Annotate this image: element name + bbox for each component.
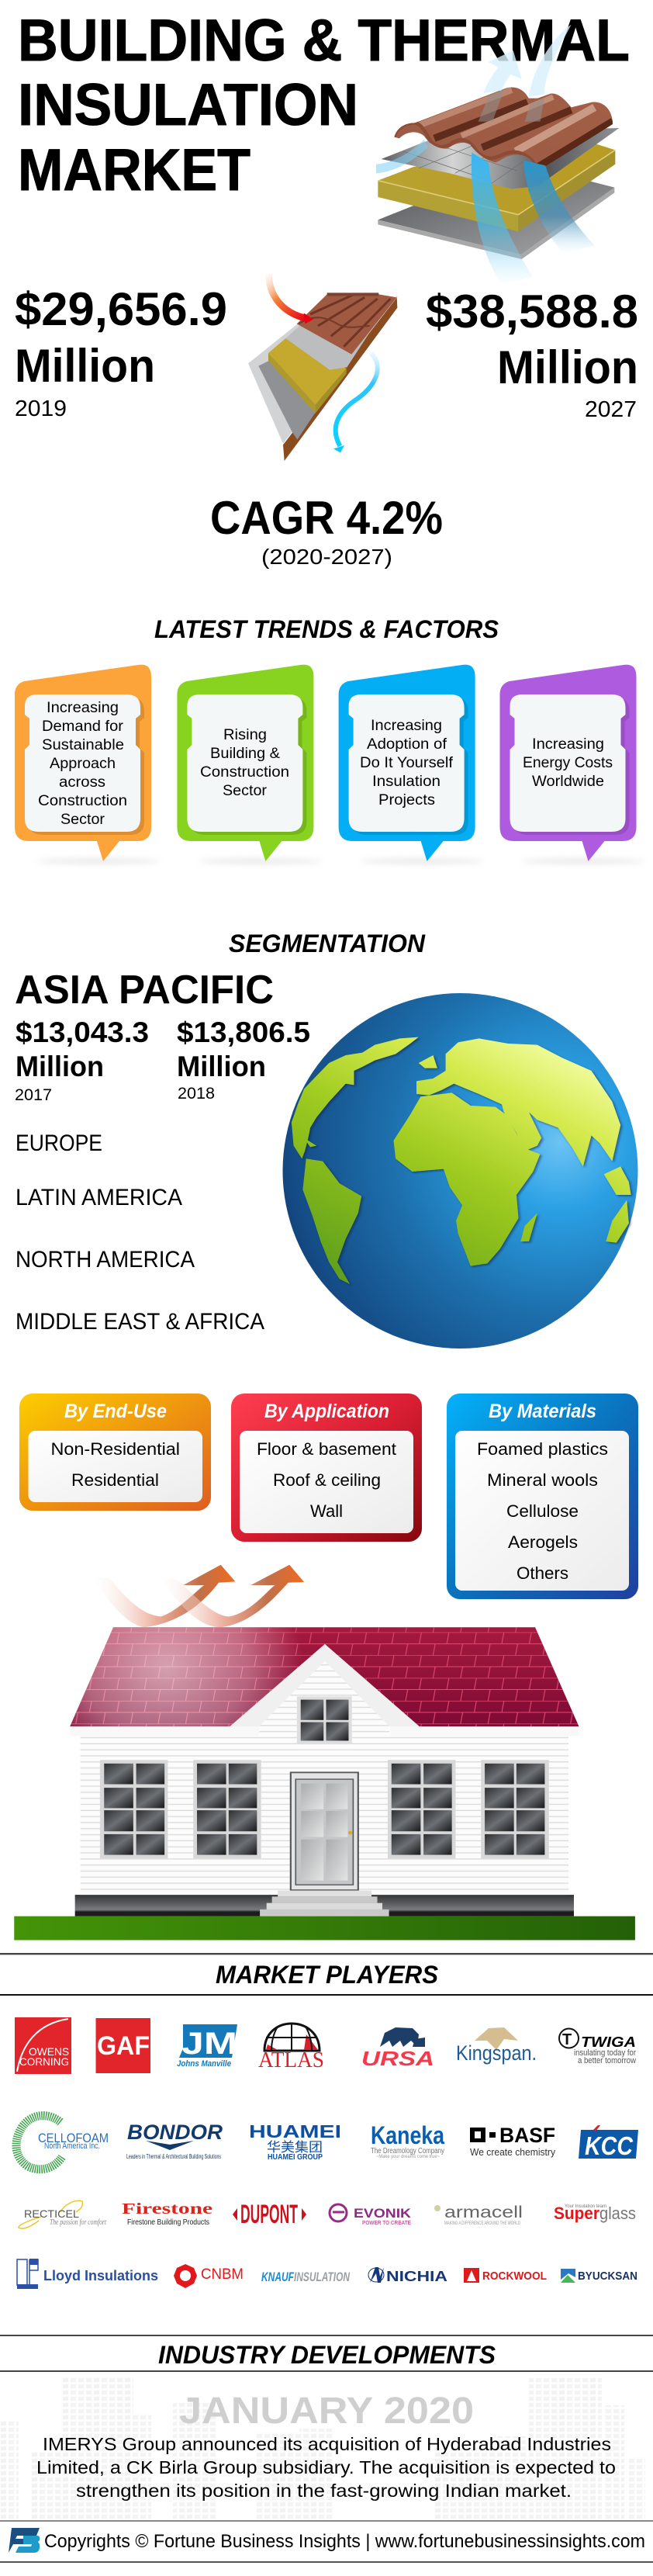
title: [18, 8, 630, 203]
logo: Firestone: Firestone Building Products: [127, 2218, 209, 2227]
logo: Nichia: [368, 2267, 447, 2284]
icon: pale up arrows over heading: [483, 25, 572, 97]
title: MARKET: [18, 137, 250, 203]
logo: Kaneka: The Dreamology Company: [371, 2147, 444, 2155]
logo: BASF: We create chemistry: [470, 2146, 555, 2158]
logo: Superglass: [554, 2204, 636, 2223]
logo: Cellofoam: North America Inc.: [44, 2141, 100, 2151]
stat: CAGR: CAGR 4.2%: [210, 492, 443, 544]
stat: 2027 market value: 2027: [585, 397, 637, 422]
text: development date: JANUARY 2020: [179, 2391, 474, 2432]
panel: Asia Pacific stats: Million: [177, 1051, 266, 1082]
stat: 2019 market value: [15, 283, 227, 421]
logo: Atlas: [258, 2024, 324, 2072]
logo: Byucksan: [561, 2269, 637, 2283]
icon: layered roof insulation: [376, 87, 619, 285]
heading: industry developments: INDUSTRY DEVELOPMENTS: [158, 2341, 496, 2369]
logo: Twiga: [559, 2028, 636, 2065]
logo: Knauf Insulation: INSULATION: [294, 2270, 351, 2284]
logo: Bondor: BONDOR: [127, 2121, 223, 2144]
icon: heat arrows: [92, 1565, 304, 1627]
text: development description: [36, 2434, 616, 2501]
logo: Lloyd Insulations: [17, 2259, 158, 2289]
panel: trend card orange: across: [59, 774, 105, 791]
icon: house: [14, 1627, 635, 1940]
text: other regions: NORTH AMERICA: [16, 1247, 195, 1272]
panel: Asia Pacific stats: Million: [16, 1051, 104, 1082]
panel: Asia Pacific stats: $13,043.3: [16, 1016, 149, 1048]
panel: trend card blue: Do It Yourself: [360, 755, 454, 771]
logo: BASF: BASF: [499, 2124, 555, 2147]
panel: trend card blue: Increasing: [371, 718, 442, 734]
panel: by end-use: Residential: [71, 1470, 159, 1490]
panel: trend card blue: Adoption of: [367, 736, 447, 753]
logo: Bondor: Leaders in Thermal & Architectural Building Solutions: [126, 2153, 221, 2160]
text: development description: IMERYS Group announced its acquisition of Hyderabad Industries: [43, 2434, 611, 2454]
panel: Asia Pacific stats: 2018: [178, 1085, 215, 1103]
panel: trend card orange: Sector: [60, 812, 105, 828]
panel: trend card green: Rising: [223, 727, 267, 743]
stat: 2027 market value: Million: [497, 341, 638, 393]
heading: latest trends: LATEST TRENDS & FACTORS: [154, 615, 499, 643]
logo: Kaneka: [371, 2121, 444, 2159]
panel: by application: Wall: [310, 1501, 343, 1521]
panel: by end-use: Non-Residential: [51, 1439, 180, 1459]
logo: Knauf Insulation: [261, 2270, 351, 2284]
panel: Asia Pacific stats: [15, 968, 310, 1104]
globe: [282, 993, 637, 1349]
stat: 2019 market value: 2019: [15, 396, 67, 421]
stat: CAGR: [210, 492, 443, 569]
text: other regions: MIDDLE EAST & AFRICA: [16, 1309, 264, 1335]
background: city skyline: [0, 2376, 645, 2520]
heading: segmentation: SEGMENTATION: [229, 930, 426, 957]
logo: Cellofoam: [16, 2116, 109, 2169]
logo: Twiga: T: [562, 2031, 572, 2048]
logo: Twiga: TWIGA: [581, 2034, 636, 2050]
logo: Superglass: glass: [599, 2204, 636, 2223]
panel: by materials: [447, 1394, 638, 1599]
panel: by materials: Foamed plastics: [477, 1439, 608, 1459]
logo: DuPont: [233, 2200, 306, 2229]
logo: Johns Manville: JM: [181, 2027, 237, 2061]
panel: by materials: By Materials: [489, 1401, 596, 1422]
logo: GAF: [96, 2018, 150, 2073]
panel: trend card orange: Construction: [38, 793, 127, 809]
logo: KCC: KCC: [585, 2131, 634, 2160]
logo: Johns Manville: Johns Manville: [177, 2059, 231, 2069]
logo: Atlas: ATLAS: [258, 2048, 324, 2072]
logo: GAF: GAF: [97, 2031, 150, 2061]
logo: Kingspan: [456, 2027, 537, 2065]
panel: trend card orange: [15, 665, 160, 864]
text: other regions: EUROPE: [16, 1130, 102, 1156]
logo: Recticel: RECTICEL: [24, 2207, 79, 2220]
panel: by materials: Others: [517, 1563, 568, 1583]
panel: by materials: Mineral wools: [487, 1470, 598, 1490]
logo: Owens Corning: OWENS: [29, 2045, 69, 2058]
panel: trend card orange: Increasing: [47, 700, 119, 716]
text: other regions: LATIN AMERICA: [16, 1185, 182, 1210]
footer: Copyrights © Fortune Business Insights | www.fortunebusinessinsights.com: [44, 2531, 645, 2552]
logo: Armacell: armacell: [444, 2204, 523, 2221]
panel: by end-use: [19, 1394, 211, 1511]
panel: by end-use: By End-Use: [64, 1401, 167, 1422]
stat: CAGR: (2020-2027): [261, 545, 392, 569]
logo: Superglass: Your Insulation team: [565, 2204, 606, 2209]
stat: 2027 market value: [426, 286, 638, 422]
logo: Huamei: HUAMEI GROUP: [268, 2153, 323, 2162]
logo: Huamei: [249, 2121, 341, 2162]
logo: Owens Corning: CORNING: [19, 2055, 69, 2068]
panel: trend card purple: [499, 665, 645, 864]
logo: CNBM: [174, 2264, 244, 2288]
logo: CNBM: CNBM: [201, 2266, 244, 2283]
logo: Cellofoam: CELLOFOAM: [38, 2131, 109, 2145]
logo: DuPont: DUPONT: [240, 2200, 298, 2229]
panel: by materials: Cellulose: [506, 1501, 579, 1521]
logo: Superglass: Super: [554, 2204, 599, 2223]
panel: trend card green: Construction: [200, 764, 289, 781]
panel: trend card blue: Projects: [378, 792, 435, 808]
logo: Recticel: The passion for comfort: [50, 2218, 106, 2227]
panel: Asia Pacific stats: ASIA PACIFIC: [15, 968, 274, 1013]
panel: trend card purple: Increasing: [532, 736, 604, 753]
logo: Huamei: 华美集团: [267, 2140, 323, 2155]
panel: trend card green: Building &: [210, 746, 280, 762]
logo: Byucksan: BYUCKSAN: [578, 2270, 637, 2283]
title: INSULATION: [18, 72, 358, 138]
logo: Evonik: [330, 2204, 412, 2226]
title: BUILDING & THERMAL: [18, 8, 630, 74]
logo: Evonik: POWER TO CREATE: [362, 2221, 411, 2226]
panel: trend card purple: Worldwide: [532, 774, 604, 790]
panel: trend card orange: Approach: [50, 756, 116, 772]
stat: 2019 market value: $29,656.9: [15, 283, 227, 335]
logo: Armacell: [434, 2204, 523, 2226]
stat: 2019 market value: Million: [15, 340, 155, 392]
logo: Evonik: EVONIK: [354, 2206, 412, 2221]
footer: [0, 2520, 653, 2563]
logo: Kaneka: ~Make your dreams come true~: [376, 2155, 440, 2159]
panel: trend card green: [177, 665, 322, 864]
logo: Twiga: insulating today for: [574, 2048, 636, 2058]
panel: trend card orange: Sustainable: [42, 737, 124, 753]
text: development description: strengthen its position in the fast-growing Indian market.: [76, 2481, 572, 2501]
logo: URSA: [361, 2027, 434, 2070]
logo: Armacell: MAKING A DIFFERENCE AROUND THE WORLD: [444, 2221, 520, 2226]
panel: trend card green: Sector: [223, 783, 268, 799]
logo: Johns Manville: [177, 2024, 237, 2069]
panel: trend card blue: [339, 665, 484, 864]
logo: Nichia: NICHIA: [386, 2269, 447, 2284]
icon: roof cross-section: [248, 274, 398, 461]
panel: by application: [231, 1394, 422, 1542]
panel: trend card orange: Demand for: [42, 718, 124, 735]
panel: by application: Roof & ceiling: [273, 1470, 381, 1490]
panel: trend card blue: Insulation: [372, 774, 441, 790]
logo: Firestone: Firestone: [122, 2200, 212, 2218]
panel: by application: Floor & basement: [257, 1439, 396, 1459]
logo: Bondor: [126, 2121, 223, 2160]
logo: Lloyd Insulations: Lloyd Insulations: [43, 2268, 158, 2283]
logo: Firestone: [122, 2200, 212, 2227]
logo: Twiga: a better tomorrow: [578, 2056, 636, 2065]
logo: Huamei: HUAMEI: [249, 2121, 341, 2141]
logo: Rockwool: ROCKWOOL: [482, 2270, 547, 2283]
heading: market players: MARKET PLAYERS: [216, 1961, 439, 1989]
panel: trend card purple: Energy Costs: [523, 755, 613, 771]
stat: 2027 market value: $38,588.8: [426, 286, 638, 338]
logo: BASF: [470, 2124, 555, 2158]
panel: Asia Pacific stats: 2017: [15, 1086, 52, 1104]
logo: Owens Corning: [15, 2017, 71, 2074]
logo: Knauf Insulation: KNAUF: [261, 2270, 294, 2284]
logo: Recticel: [19, 2200, 106, 2228]
logo: Rockwool: [464, 2268, 547, 2283]
panel: by materials: Aerogels: [508, 1532, 578, 1552]
logo: Kaneka: Kaneka: [371, 2121, 444, 2149]
logo: URSA: URSA: [361, 2047, 434, 2070]
logo: Kingspan: Kingspan.: [456, 2041, 537, 2065]
panel: Asia Pacific stats: $13,806.5: [177, 1016, 310, 1048]
text: other regions: [16, 1130, 264, 1335]
panel: by application: By Application: [264, 1401, 389, 1422]
text: development description: Limited, a CK Birla Group subsidiary. The acquisition is expected to: [36, 2457, 616, 2477]
